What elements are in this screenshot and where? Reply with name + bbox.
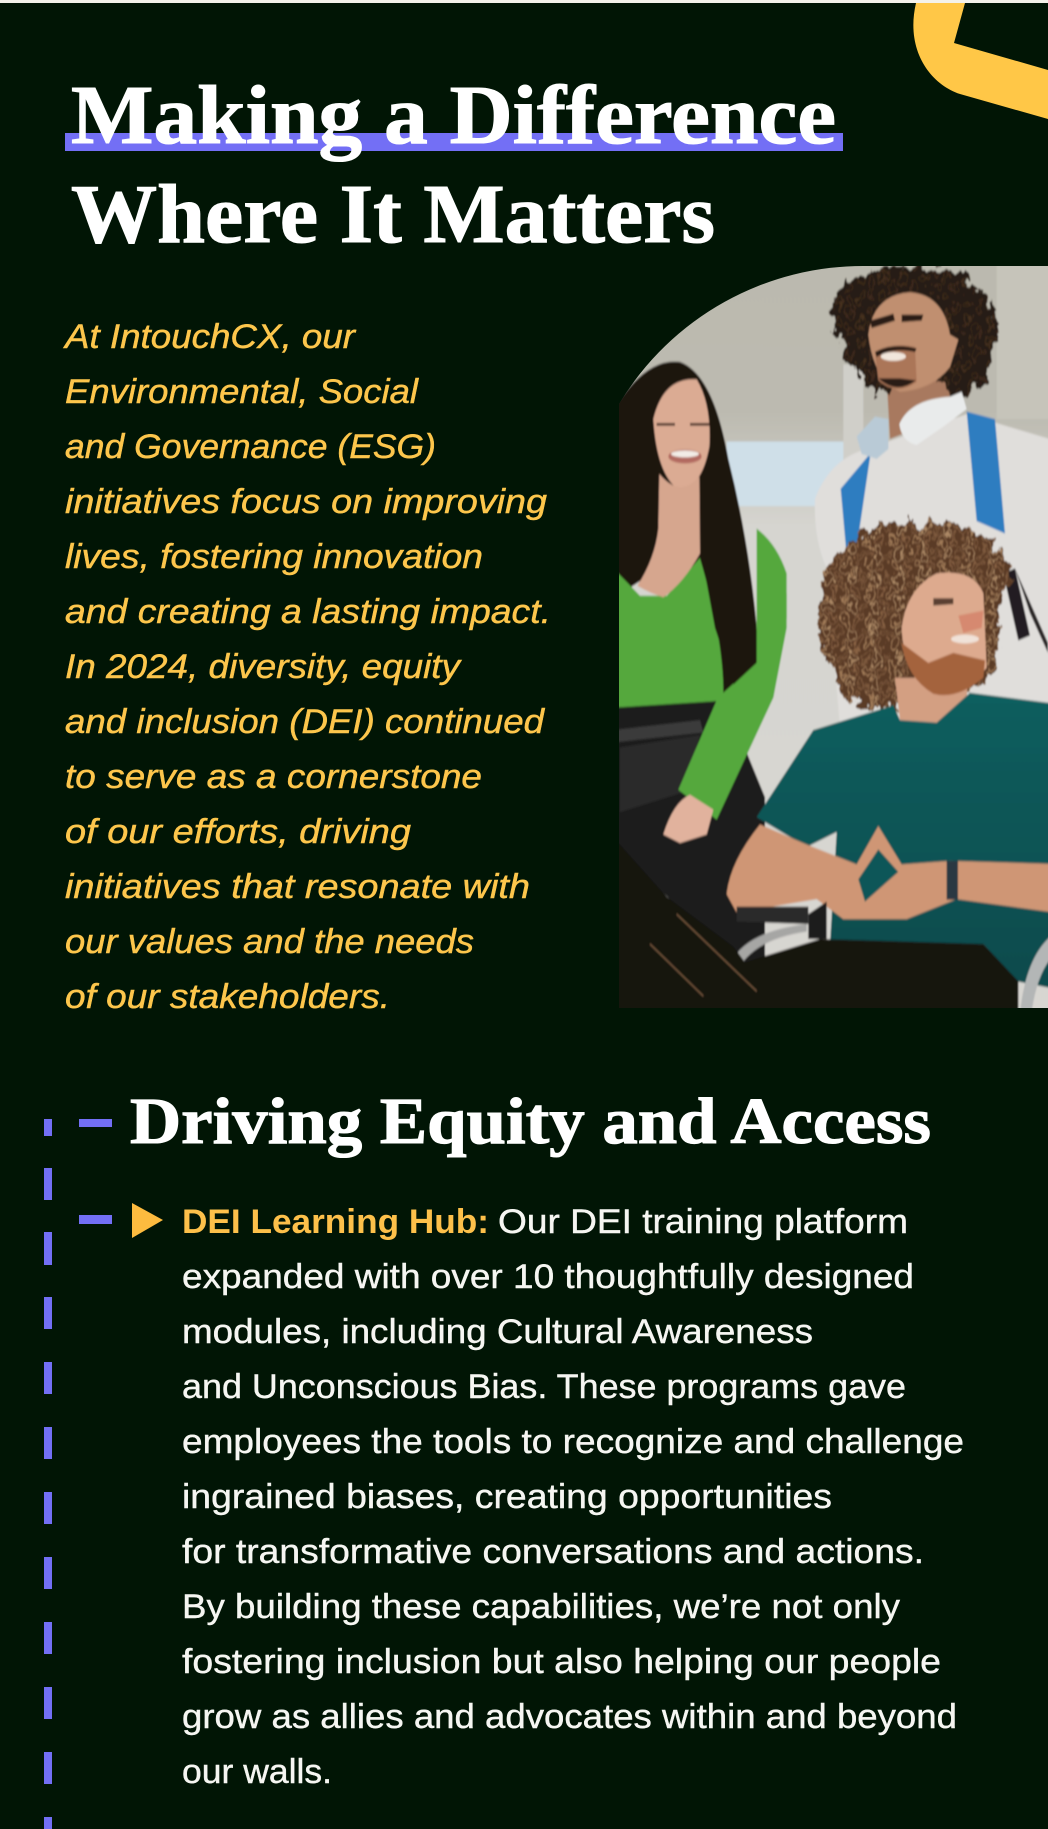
man back: neck and hair [887, 379, 953, 439]
DEI Learning Hub paragraph: grow as allies and advocates within and beyond [182, 1698, 957, 1736]
intro paragraph: In 2024, diversity, equity [65, 648, 462, 686]
DEI Learning Hub paragraph: employees the tools to recognize and challenge [182, 1423, 964, 1461]
dark diagonal object bottom left [619, 844, 746, 1008]
DEI Learning Hub paragraph: our walls. [182, 1753, 332, 1791]
woman: green top [613, 529, 787, 708]
woman: hand [663, 795, 713, 843]
icon: yellow triangle bullet [132, 1203, 163, 1238]
intro paragraph: lives, fostering innovation [65, 538, 483, 576]
woman: trousers [613, 700, 765, 966]
woman: face and chest [653, 379, 710, 490]
title [65, 69, 843, 261]
headphones [857, 417, 888, 459]
intro paragraph: and Governance (ESG) [65, 428, 436, 466]
intro paragraph: of our efforts, driving [65, 813, 411, 851]
DEI Learning Hub paragraph: modules, including Cultural Awareness [182, 1313, 813, 1351]
DEI Learning Hub paragraph: By building these capabilities, we’re not only [182, 1588, 900, 1626]
lead-in label: DEI Learning Hub: [182, 1203, 489, 1241]
DEI Learning Hub paragraph: and Unconscious Bias. These programs gave [182, 1368, 906, 1406]
decorative yellow corner shape [913, 3, 1048, 119]
intro paragraph: to serve as a cornerstone [65, 758, 482, 796]
man back: face [868, 292, 958, 392]
DEI Learning Hub paragraph: ingrained biases, creating opportunities [182, 1478, 832, 1516]
man front: hair [818, 522, 1012, 708]
section heading marker dash [79, 1119, 112, 1127]
intro paragraph [63, 318, 551, 1016]
man back: shirt [815, 414, 1048, 728]
wheelchair and trousers [744, 936, 1020, 1008]
DEI Learning Hub paragraph: fostering inclusion but also helping our people [182, 1643, 941, 1681]
woman: hair [613, 361, 759, 695]
intro paragraph: initiatives focus on improving [65, 483, 547, 521]
intro paragraph: and inclusion (DEI) continued [65, 703, 545, 741]
intro paragraph: of our stakeholders. [65, 978, 390, 1016]
man front: arms and hands [727, 825, 1048, 919]
DEI Learning Hub paragraph: for transformative conversations and actions. [182, 1533, 924, 1571]
woman: sleeve over trousers [678, 593, 787, 820]
title line 1: Making a Difference [71, 69, 836, 162]
intro paragraph: At IntouchCX, our [63, 318, 357, 356]
DEI Learning Hub paragraph: Our DEI training platform [498, 1203, 908, 1241]
man front: neck and face [895, 678, 968, 723]
intro paragraph: Environmental, Social [65, 373, 420, 411]
man front: teal shirt [757, 693, 1048, 991]
title line 2: Where It Matters [71, 168, 715, 261]
intro paragraph: initiatives that resonate with [65, 868, 530, 906]
top edge strip [0, 0, 1048, 3]
list item marker dash [79, 1215, 112, 1224]
DEI Learning Hub paragraph: expanded with over 10 thoughtfully designed [182, 1258, 914, 1296]
DEI Learning Hub paragraph [182, 1203, 964, 1791]
section heading: Driving Equity and Access [130, 1085, 931, 1158]
photo: three young people, one in a wheelchair [619, 266, 1048, 1008]
intro paragraph: and creating a lasting impact. [65, 593, 551, 631]
vertical dashed timeline [44, 1119, 52, 1829]
title underline highlight [65, 133, 843, 151]
intro paragraph: our values and the needs [65, 923, 474, 961]
